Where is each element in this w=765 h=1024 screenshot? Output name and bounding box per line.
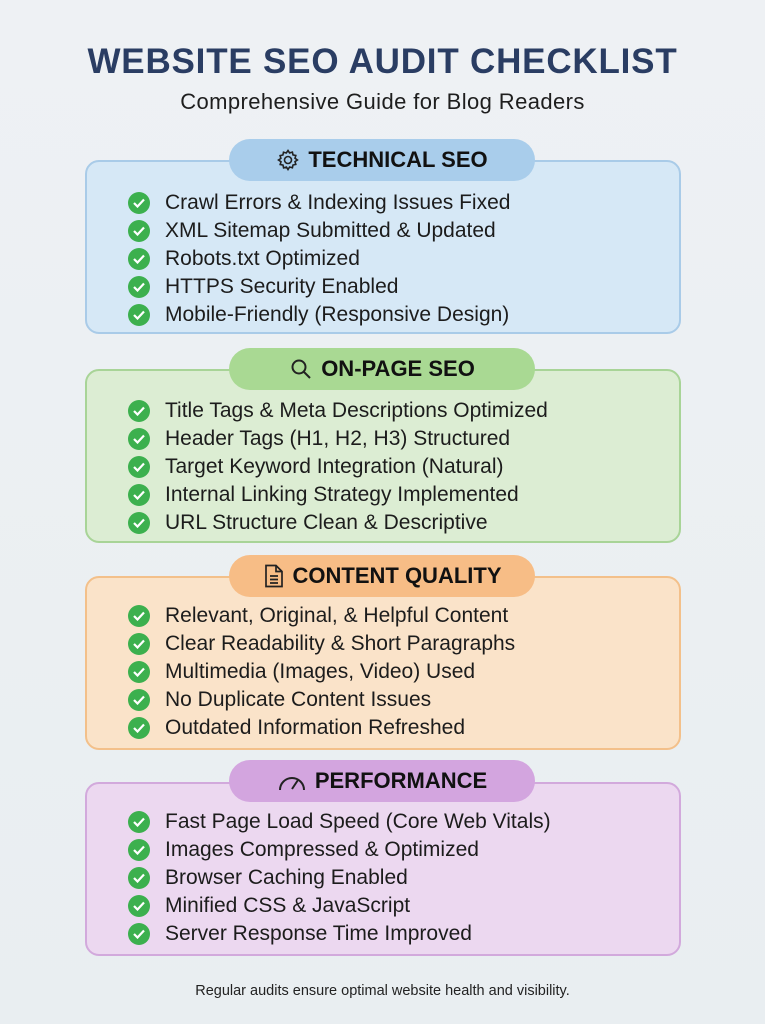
list: content quality items [128, 604, 515, 739]
list: on-page seo items: Target Keyword Integration (Natural) [165, 455, 504, 478]
list: content quality items: No Duplicate Content Issues [165, 688, 431, 711]
list: on-page seo items: Header Tags (H1, H2, H3) Structured [165, 427, 510, 450]
subtitle: Comprehensive Guide for Blog Readers [180, 89, 585, 114]
list: technical seo items: XML Sitemap Submitted & Updated [165, 219, 496, 242]
title: WEBSITE SEO AUDIT CHECKLIST [87, 42, 678, 81]
list: performance items: Images Compressed & Optimized [165, 838, 479, 861]
panel: technical seo [85, 160, 681, 334]
list: performance items: Browser Caching Enabled [165, 866, 408, 889]
list: on-page seo items [128, 399, 548, 534]
panel: on-page seo [85, 369, 681, 543]
heading: on-page seo: ON-PAGE SEO [321, 356, 475, 381]
list: technical seo items: Crawl Errors & Indexing Issues Fixed [165, 191, 510, 214]
list: on-page seo items: Title Tags & Meta Descriptions Optimized [165, 399, 548, 422]
heading: performance: PERFORMANCE [315, 768, 487, 793]
heading: performance [229, 760, 535, 802]
heading: content quality: CONTENT QUALITY [292, 563, 502, 588]
list: on-page seo items: URL Structure Clean & Descriptive [165, 511, 488, 534]
heading: technical seo [229, 139, 535, 181]
list: technical seo items [128, 191, 510, 326]
heading: on-page seo [229, 348, 535, 390]
list: performance items: Server Response Time Improved [165, 922, 472, 945]
list: content quality items: Relevant, Original, & Helpful Content [165, 604, 508, 627]
panel: content quality [85, 576, 681, 750]
heading: technical seo: TECHNICAL SEO [308, 147, 488, 172]
list: content quality items: Multimedia (Images, Video) Used [165, 660, 475, 683]
heading: content quality [229, 555, 535, 597]
list: performance items [128, 810, 551, 945]
list: content quality items: Outdated Information Refreshed [165, 716, 465, 739]
footer note: Regular audits ensure optimal website health and visibility. [195, 983, 570, 999]
list: technical seo items: Mobile-Friendly (Responsive Design) [165, 303, 509, 326]
list: technical seo items: Robots.txt Optimized [165, 247, 360, 270]
list: on-page seo items: Internal Linking Strategy Implemented [165, 483, 519, 506]
list: technical seo items: HTTPS Security Enabled [165, 275, 398, 298]
list: content quality items: Clear Readability & Short Paragraphs [165, 632, 515, 655]
list: performance items: Fast Page Load Speed (Core Web Vitals) [165, 810, 551, 833]
list: performance items: Minified CSS & JavaScript [165, 894, 410, 917]
panel: performance [85, 782, 681, 956]
